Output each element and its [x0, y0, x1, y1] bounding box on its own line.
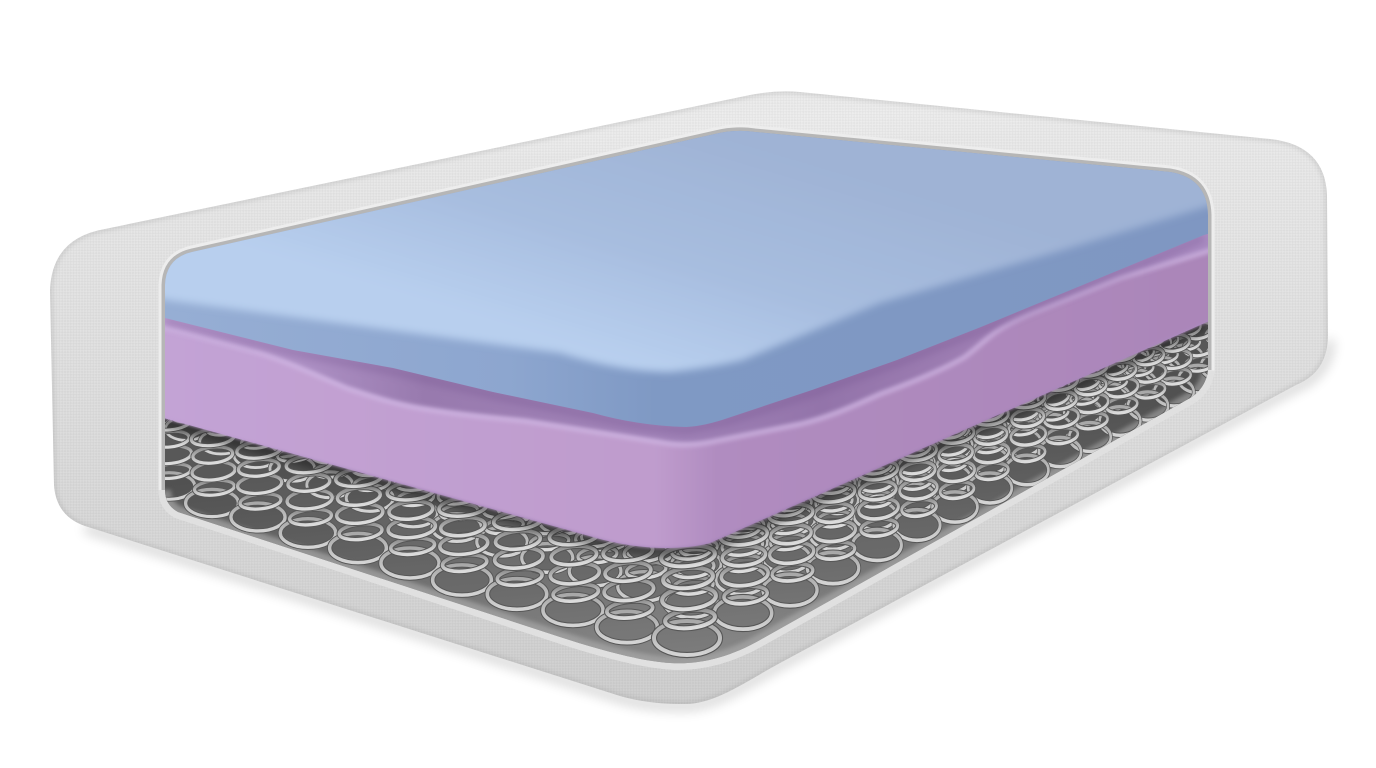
foam front faces [160, 248, 1215, 548]
floor edge light band [165, 370, 1208, 663]
purple foam layer [160, 225, 1215, 548]
pocket coil springs [165, 322, 1208, 658]
blue top layer [155, 120, 1215, 430]
mattress drop shadow [85, 340, 1330, 706]
opening rim [165, 131, 1208, 663]
outer fabric shell [50, 91, 1328, 704]
foam ridge highlight [160, 249, 1215, 444]
blue top face [155, 120, 1215, 372]
shadow under foam [164, 325, 1207, 551]
mattress cross-section [50, 91, 1328, 704]
blue side band [155, 120, 1215, 427]
blue shadow on foam [165, 238, 1204, 430]
spring layer [165, 136, 1208, 664]
foam base [160, 225, 1215, 548]
spring floor [165, 324, 1208, 664]
